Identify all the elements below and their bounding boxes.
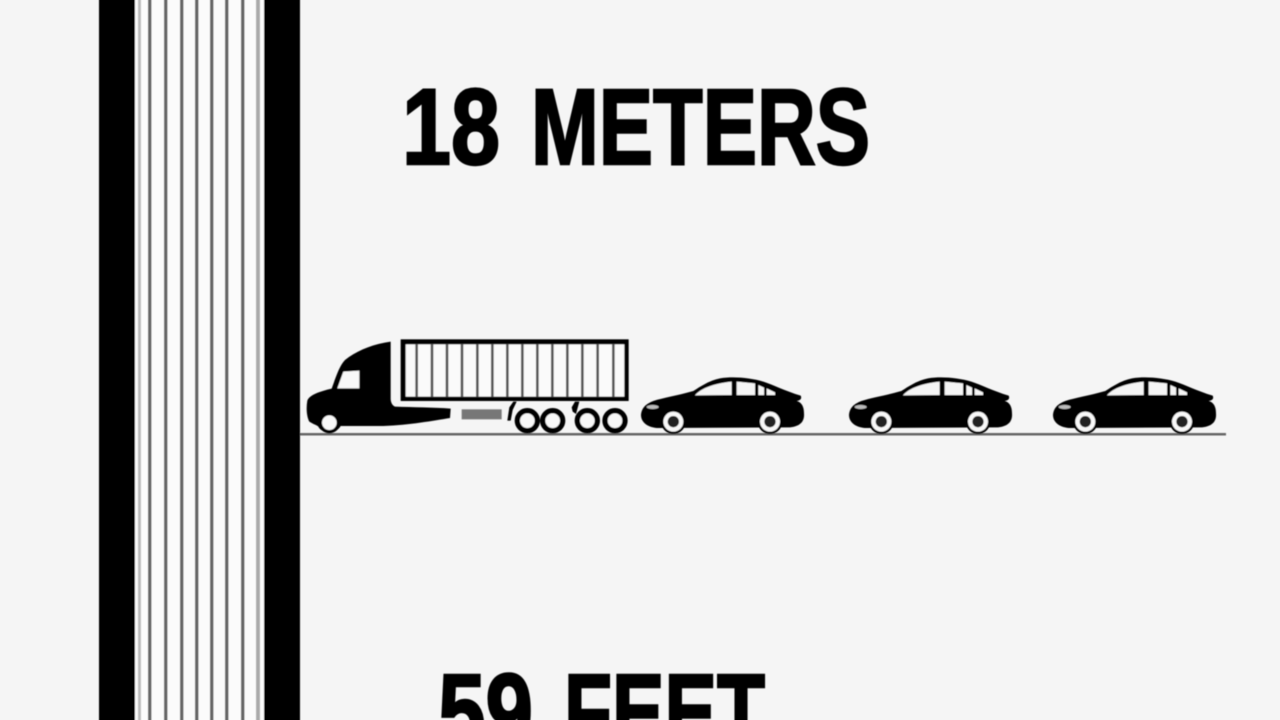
front wheel [319, 412, 340, 433]
icon: cable cross-section column [99, 0, 300, 720]
icon: car 2 [849, 377, 1012, 434]
heading: 59 feet [438, 651, 765, 720]
truck cab [307, 342, 451, 432]
fuel tank [462, 409, 502, 419]
cab window [337, 371, 359, 388]
trailer [401, 339, 629, 401]
heading: 18 meters [402, 66, 870, 187]
trailer wheels [517, 411, 625, 431]
heading: 18 meters: 18 [402, 66, 500, 187]
heading: 18 meters: METERS [531, 66, 870, 187]
icon: semi truck [307, 339, 629, 433]
trailer supports [507, 402, 579, 421]
icon: car 1 [641, 377, 804, 434]
ground line [300, 433, 1226, 436]
icon: car 3 [1053, 377, 1216, 434]
